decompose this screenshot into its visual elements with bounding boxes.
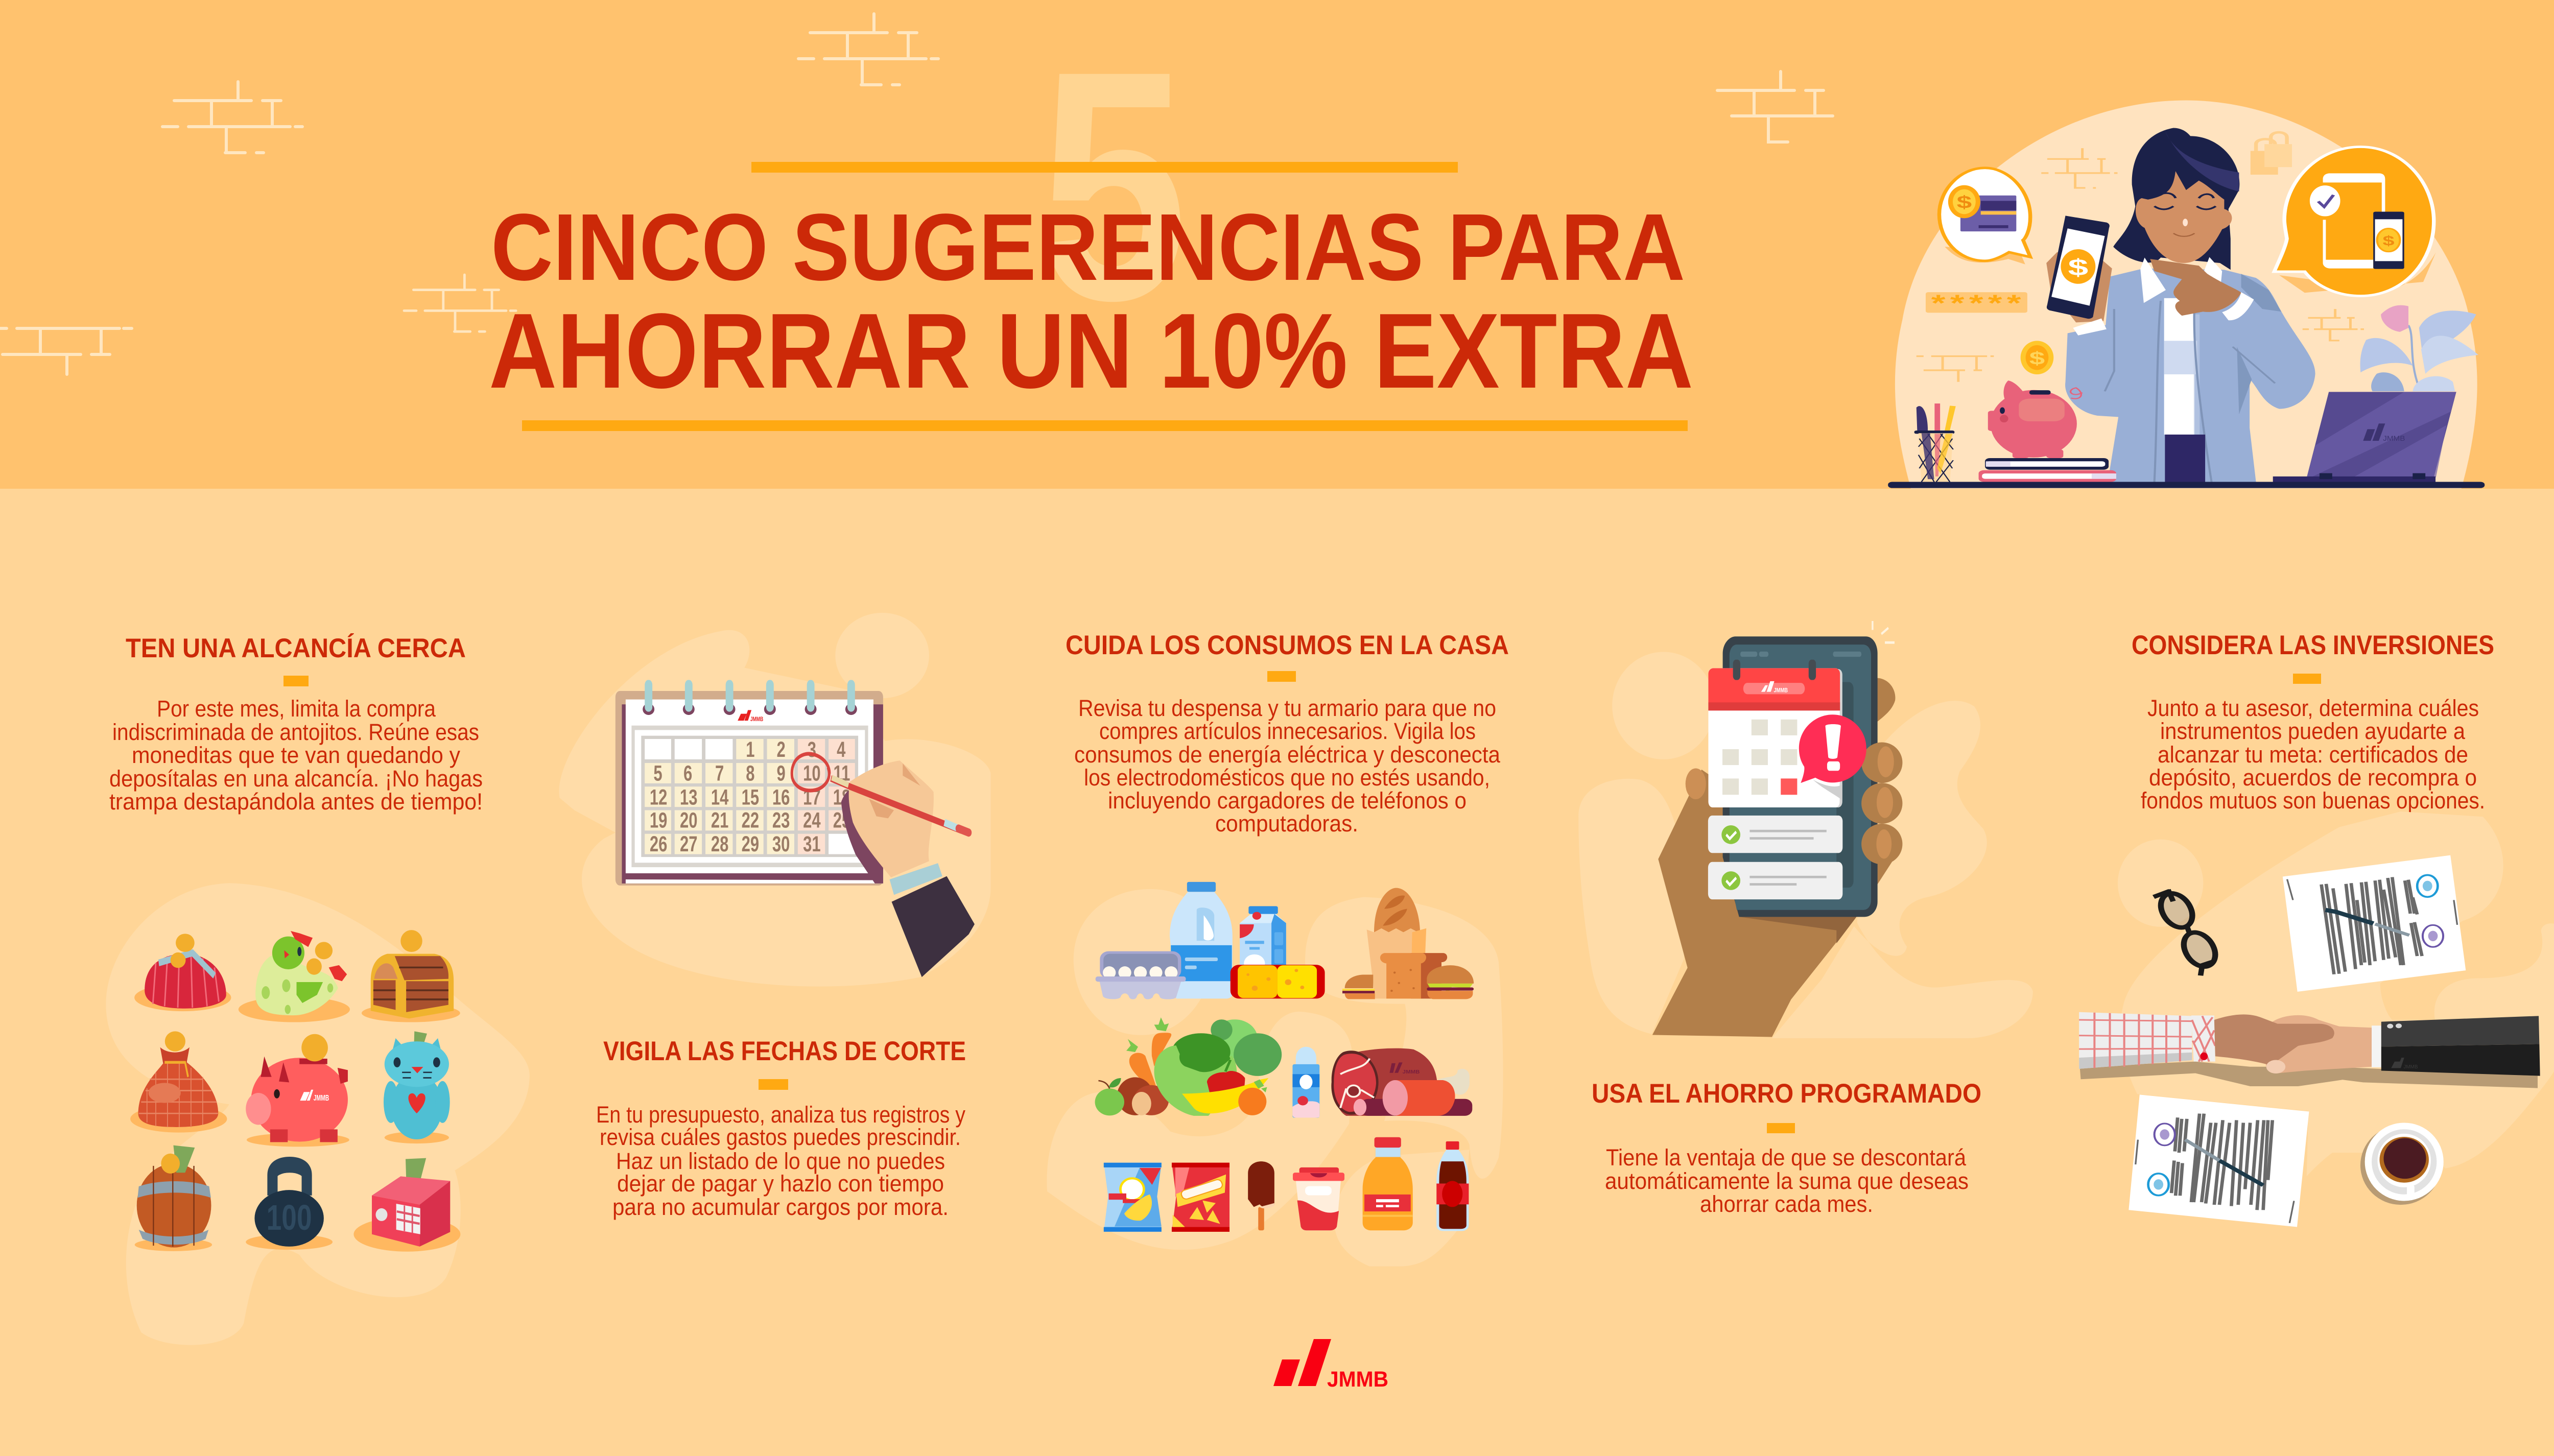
drink cup [1293,1167,1344,1230]
brick decoration top left [162,82,302,153]
accent bar [283,676,309,686]
shirt [2164,298,2194,435]
speech bubble: credit card [1939,168,2030,265]
hero illustration: woman with phone [1888,101,2485,489]
logo: JMMB: JMMB [1327,1367,1388,1392]
panel: vigila las fechas de corte [559,613,991,1220]
jacket body [2065,269,2315,482]
shaking hands [2214,1014,2372,1073]
calendar numbers: 21 [711,808,728,832]
title: AHORRAR UN 10% EXTRA [489,292,1693,411]
speech bubble: devices: $ [2383,234,2395,249]
body text: indiscriminada de antojitos. Reúne esas [112,719,479,745]
body text: incluyendo cargadores de teléfonos o [1108,787,1467,814]
heading: TEN UNA ALCANCÍA CERCA [126,633,466,663]
calendar board [616,691,883,886]
milk jug [1170,882,1233,998]
body text: fondos mutuos son buenas opciones. [2141,787,2485,814]
handshake shadow [2080,1062,2538,1088]
checklist rows [1708,816,1842,899]
heading: USA EL AHORRO PROGRAMADO [1592,1079,1981,1109]
body text: depósito, acuerdos de recompra o [2149,765,2477,791]
calendar numbers [650,737,850,856]
body text: dejar de pagar y hazlo con tiempo [617,1171,944,1197]
calendar numbers: 8 [746,760,754,785]
ice cream bar [1248,1161,1274,1230]
yogurt bottle [1292,1047,1319,1117]
logo: JMMB [1273,1339,1388,1392]
calendar numbers: 24 [803,808,821,832]
barrel bank [135,1145,212,1251]
calendar logo [738,710,764,723]
pen holder [1914,403,1956,482]
calendar numbers: 23 [772,808,790,832]
heading: VIGILA LAS FECHAS DE CORTE [603,1036,966,1066]
plant [2360,305,2478,391]
pale blobs [2118,811,2554,1176]
pink pig bank [246,1034,349,1147]
handshake illustration [2079,811,2554,1227]
speech bubble: devices [2274,147,2436,296]
calendar numbers: 11 [834,760,850,785]
calendar numbers: 25 [833,808,850,832]
alert bubble [1799,714,1866,800]
burgers [1342,965,1474,999]
vegetables [1095,1017,1282,1116]
fingers [1861,742,1902,865]
treasure chest [362,930,460,1022]
document bottom left [2129,1094,2309,1227]
calendar illustration [559,613,991,987]
body text [109,696,483,815]
milk carton [1240,906,1286,972]
body text: computadoras. [1215,810,1358,837]
body text: Haz un listado de lo que no puedes [616,1148,945,1174]
date circled in red [792,754,830,791]
body text: Junto a tu asesor, determina cuáles [2147,695,2479,721]
body text: alcanzar tu meta: certificados de [2158,742,2468,768]
panel: considera las inversiones [2079,630,2554,1227]
brick decoration behind title [404,275,516,331]
body text: Revisa tu despensa y tu armario para que no [1078,695,1496,721]
cola bottle [1436,1141,1469,1231]
floating coin: $ [2029,348,2045,368]
jacket sleeve [892,876,975,977]
heading: CUIDA LOS CONSUMOS EN LA CASA [1066,630,1509,660]
calendar numbers: 28 [711,831,728,856]
calendar numbers: 14 [711,784,728,809]
calendar numbers: 2 [776,737,786,761]
body text: automáticamente la suma que deseas [1605,1168,1969,1194]
collar [2140,257,2222,303]
body text [1074,695,1501,837]
hand [1652,678,1895,1037]
calendar numbers: 16 [772,784,790,809]
password field: ***** [1931,290,2021,316]
calendar numbers: 9 [776,760,786,785]
calendar numbers: 26 [650,831,667,856]
laptop: JMMB [2383,435,2405,442]
body text [2141,695,2485,814]
pale blob [106,883,530,1345]
potato chips bag [1104,1163,1162,1232]
pointing hand [2150,259,2241,316]
glasses [2154,890,2221,975]
calendar card: JMMB [1773,687,1788,694]
books [1979,458,2116,482]
panel: usa el ahorro programado [1578,621,2033,1217]
kettlebell bank [246,1165,333,1250]
woman [2046,128,2315,482]
calendar numbers: 29 [742,831,759,856]
hair [2113,128,2239,270]
title: CINCO SUGERENCIAS PARA [491,195,1685,300]
calendar spiral rings [643,680,857,715]
body text: moneditas que te van quedando y [132,742,460,768]
pale blobs [1047,889,1503,1267]
calendar numbers: 3 [808,737,816,761]
shirt cuff [889,863,942,895]
cloth bag [130,1031,227,1133]
body text [596,1102,965,1220]
calendar numbers: 1 [746,737,754,761]
body text: para no acumular cargos por mora. [612,1194,949,1220]
panel: cuida los consumos en la casa [1047,630,1509,1267]
groceries illustration [1047,882,1503,1267]
body text: instrumentos pueden ayudarte a [2160,718,2466,744]
juice bottle [1363,1137,1413,1230]
calendar numbers: 31 [803,831,821,856]
pale dome background [1895,101,2477,489]
phone body [1723,636,1878,917]
accent bar [759,1079,788,1090]
toast [1411,953,1447,998]
body text: Tiene la ventaja de que se descontará [1606,1144,1967,1171]
blue cat bank [384,1031,450,1143]
laptop [2273,392,2456,482]
calendar numbers: 17 [803,784,821,809]
green hen [239,931,350,1022]
heading: CONSIDERA LAS INVERSIONES [2132,630,2494,660]
face [2136,171,2232,263]
big numeral five: 5 [1039,3,1188,368]
trousers [2165,435,2205,482]
accent bar [1767,1123,1795,1133]
phone screen [1730,645,1871,910]
accent bar [2293,674,2321,684]
background line decorations [1917,148,2364,382]
calendar numbers: 7 [715,760,724,785]
nacho chips bag [1172,1163,1229,1232]
calendar numbers: 22 [742,808,759,832]
calendar numbers: 30 [772,831,790,856]
body text: En tu presupuesto, analiza tus registros y [596,1102,965,1128]
body text: revisa cuáles gastos puedes prescindir. [600,1124,961,1150]
checked sleeve [2079,1012,2215,1069]
calendar cells [645,739,855,854]
phone reminder illustration [1578,621,2033,1038]
kettlebell bank: 100 [267,1198,312,1237]
hand with pencil [831,760,968,884]
hair highlight [2165,131,2239,192]
body text: los electrodomésticos que no estés usando, [1084,765,1490,791]
body text: deposítalas en una alcancía. ¡No hagas [109,766,483,792]
padlocks [2251,132,2292,175]
floating coin [2021,341,2053,374]
bread bag [1367,888,1447,998]
pink pig bank: JMMB [314,1093,329,1103]
brick decoration top center [798,14,938,85]
suit sleeve [2372,1016,2540,1076]
woman: $ [2068,254,2088,280]
calendar numbers: 27 [680,831,698,856]
phone [2047,216,2110,319]
title [489,195,1693,411]
egg carton [1096,951,1186,999]
brick decoration left edge [0,328,132,374]
calendar numbers: 13 [680,784,698,809]
suit sleeve: JMMB [2403,1063,2418,1069]
accent bar [1267,671,1296,682]
pale blobs [1578,652,2033,1038]
header band [0,0,2554,489]
panel: ten una alcancia cerca [106,633,530,1345]
notification sparks [1873,621,1895,642]
red purse [134,934,231,1011]
piggy bank on books [1988,380,2083,458]
calendar numbers: 4 [837,737,846,761]
title top rule [751,162,1458,173]
calendar logo: JMMB [750,717,764,723]
document top right [2283,855,2466,992]
coffee cup [2360,1123,2444,1205]
calendar numbers: 12 [650,784,667,809]
body text [1605,1144,1969,1217]
body text: consumos de energía eléctrica y desconecta [1074,742,1501,768]
ham and sausages: JMMB [1403,1069,1420,1075]
piggy banks illustration [106,883,530,1345]
speech bubble: credit card: $ [1957,193,1972,212]
body text: Por este mes, limita la compra [157,696,436,722]
calendar numbers: 19 [650,808,667,832]
body text: ahorrar cada mes. [1700,1191,1873,1217]
calendar card [1708,660,1842,807]
calendar numbers: 6 [683,760,692,785]
desk [1888,482,2485,488]
hand holding phone [2046,252,2112,322]
ham and sausages [1331,1048,1472,1116]
red safe box [353,1158,460,1252]
calendar numbers: 10 [803,760,821,785]
calendar numbers: 5 [653,760,663,785]
cheese [1231,965,1325,998]
title bottom rule [522,420,1688,431]
body text: compres artículos innecesarios. Vigila los [1099,718,1476,744]
pale blob [559,630,991,987]
calendar numbers: 15 [742,784,759,809]
calendar numbers: 20 [680,808,698,832]
body text: trampa destapándola antes de tiempo! [109,789,483,815]
brick decoration top right [1717,71,1833,142]
calendar numbers: 18 [833,784,850,809]
